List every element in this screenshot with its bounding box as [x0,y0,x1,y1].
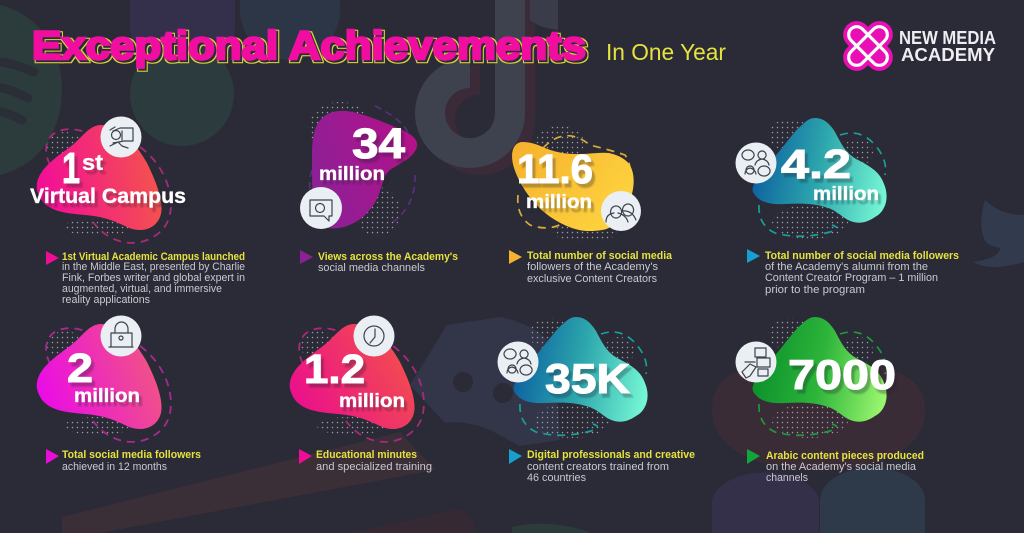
panel: 2 million [37,316,201,473]
panel: 11.6 million [509,126,673,285]
panel: 4.2 million [736,118,959,296]
dots [47,331,132,435]
icon: video comment [300,187,342,229]
dots [536,126,617,242]
value: 11.6 [517,146,593,192]
arrow [509,449,522,464]
description [62,449,201,473]
faded discord logo [410,317,560,446]
description: augmented, virtual, and immersive [62,283,222,295]
arrow [46,251,59,265]
dots [768,318,873,438]
dots [768,119,873,239]
description [765,250,959,296]
blob [290,324,415,429]
value: st [82,150,104,175]
panel: 34 million [300,102,458,274]
blob [753,317,887,422]
description: Total social media followers [62,449,201,461]
logo mark [844,22,892,70]
arrow [300,250,313,264]
dashed rings [759,133,886,236]
faded red ellipse [712,362,925,470]
dots [300,331,385,435]
blob [37,125,162,230]
description: followers of the Academy's [527,261,658,273]
blob [514,317,648,422]
description: Total number of social media [527,250,673,262]
arrow [747,249,760,263]
logo text: NEW MEDIA [899,28,996,48]
description: social media channels [318,262,425,274]
value: million [813,184,879,205]
value: Virtual Campus [30,185,186,208]
icon: person at laptop [100,316,142,356]
arrow [299,449,312,464]
description: Fink, Forbes writer and global expert in [62,272,245,284]
description: Digital professionals and creative [527,449,695,461]
description: prior to the program [765,284,865,296]
panel: 1.2 million [290,316,432,473]
description: Total number of social media followers [765,250,959,262]
value: million [526,192,592,213]
description [318,251,458,274]
faded top circles [130,0,340,146]
icon: content pieces [736,342,776,382]
description: Content Creator Program – 1 million [765,272,938,284]
description [527,449,695,484]
panel: 35K [498,317,695,484]
blob [753,118,887,223]
faded laptop [62,432,475,533]
value: million [339,391,405,412]
arrow [46,449,59,464]
icon: people talking [498,342,538,382]
value [30,144,186,208]
icon: clock [354,316,394,356]
dashed rings [46,328,171,442]
description: exclusive Content Creators [527,273,657,285]
value: 34 [352,120,405,168]
dots [47,132,132,236]
value [781,141,879,205]
dashed rings [310,106,415,222]
description [766,450,924,484]
dashed rings [520,332,647,435]
value: 1 [62,144,80,193]
description: 1st Virtual Academic Campus launched [62,251,245,263]
dashed rings [759,332,886,435]
description: achieved in 12 months [62,461,167,473]
dots [529,318,634,438]
value: 35K [545,355,630,402]
icon: people talking [736,142,776,184]
description: Educational minutes [316,449,417,461]
description: on the Academy's social media [766,461,917,473]
subheading: In One Year [606,39,726,65]
description: Arabic content pieces produced [766,450,924,462]
blob [37,324,162,429]
description: and specialized training [316,461,432,473]
value [319,120,405,185]
dots [308,102,400,237]
dashed rings [518,136,630,228]
title [32,24,726,68]
value [517,146,593,213]
description: channels [766,472,808,484]
value: 2 [67,345,93,391]
arrow [509,250,522,264]
description: of the Academy's alumni from the [765,261,928,273]
icon: virtual reality headset [100,116,142,158]
value: 4.2 [781,141,851,187]
faded bottom circles [512,468,925,533]
heading: Exceptional Achievements [32,24,586,68]
description: Views across the Academy's [318,251,458,263]
blob [512,142,634,231]
value: 7000 [788,351,896,398]
panel: 1st virtual campus [30,116,245,306]
value: million [319,164,385,185]
value: million [74,386,140,407]
description [316,449,432,473]
icon: content creators [601,191,641,231]
description: reality applications [62,294,150,306]
value [67,345,140,407]
logo: ACADEMY [901,45,995,65]
faded twitter logo [973,200,1024,267]
description: in the Middle East, presented by Charlie [62,261,245,273]
description: content creators trained from [527,461,669,473]
value [304,346,405,412]
value: 1.2 [304,346,365,392]
arrow [747,449,760,464]
dashed rings [46,129,171,243]
blob [312,111,417,228]
logo [844,22,996,70]
faded spotify logo [0,5,62,175]
description: 46 countries [527,472,586,484]
panel: 7000 [736,317,924,484]
dashed rings [299,328,424,442]
faded tiktok logo [430,0,558,160]
description [527,250,673,285]
description [62,251,245,306]
